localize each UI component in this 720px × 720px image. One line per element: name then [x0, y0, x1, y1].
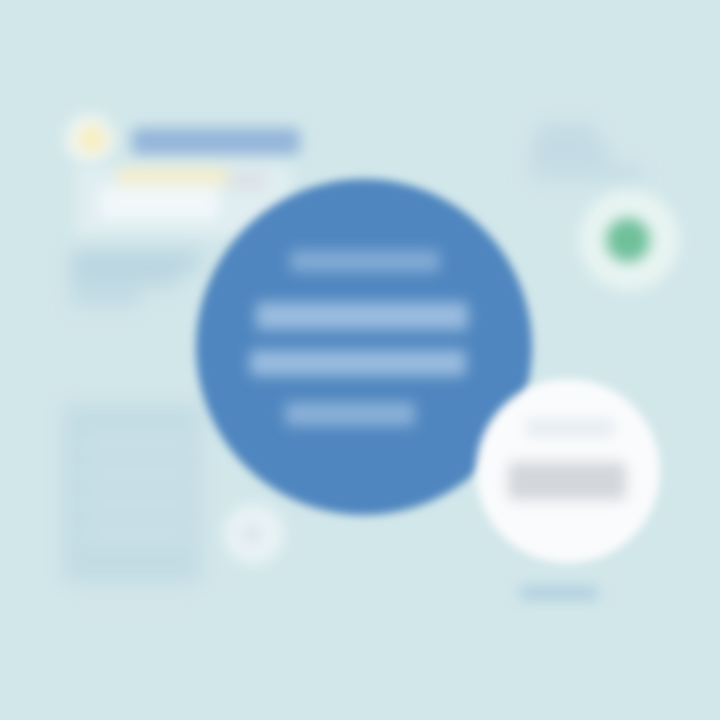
icon: green check badge [579, 190, 679, 290]
text block: left middle [70, 252, 200, 304]
text block: top-right [530, 126, 642, 178]
panel: lower-left list [62, 404, 202, 584]
icon: small white circle [224, 504, 284, 564]
text block: grey label [508, 420, 626, 500]
panel: top-left card [76, 166, 292, 236]
panel: lower-right white circle [476, 379, 660, 563]
caption: lower right [520, 586, 598, 600]
icon: yellow badge [65, 114, 115, 164]
text block: circle text lines [250, 250, 468, 426]
panel: top-left header [65, 114, 300, 164]
panel: central blue circle [196, 179, 532, 515]
heading bar [132, 128, 300, 155]
